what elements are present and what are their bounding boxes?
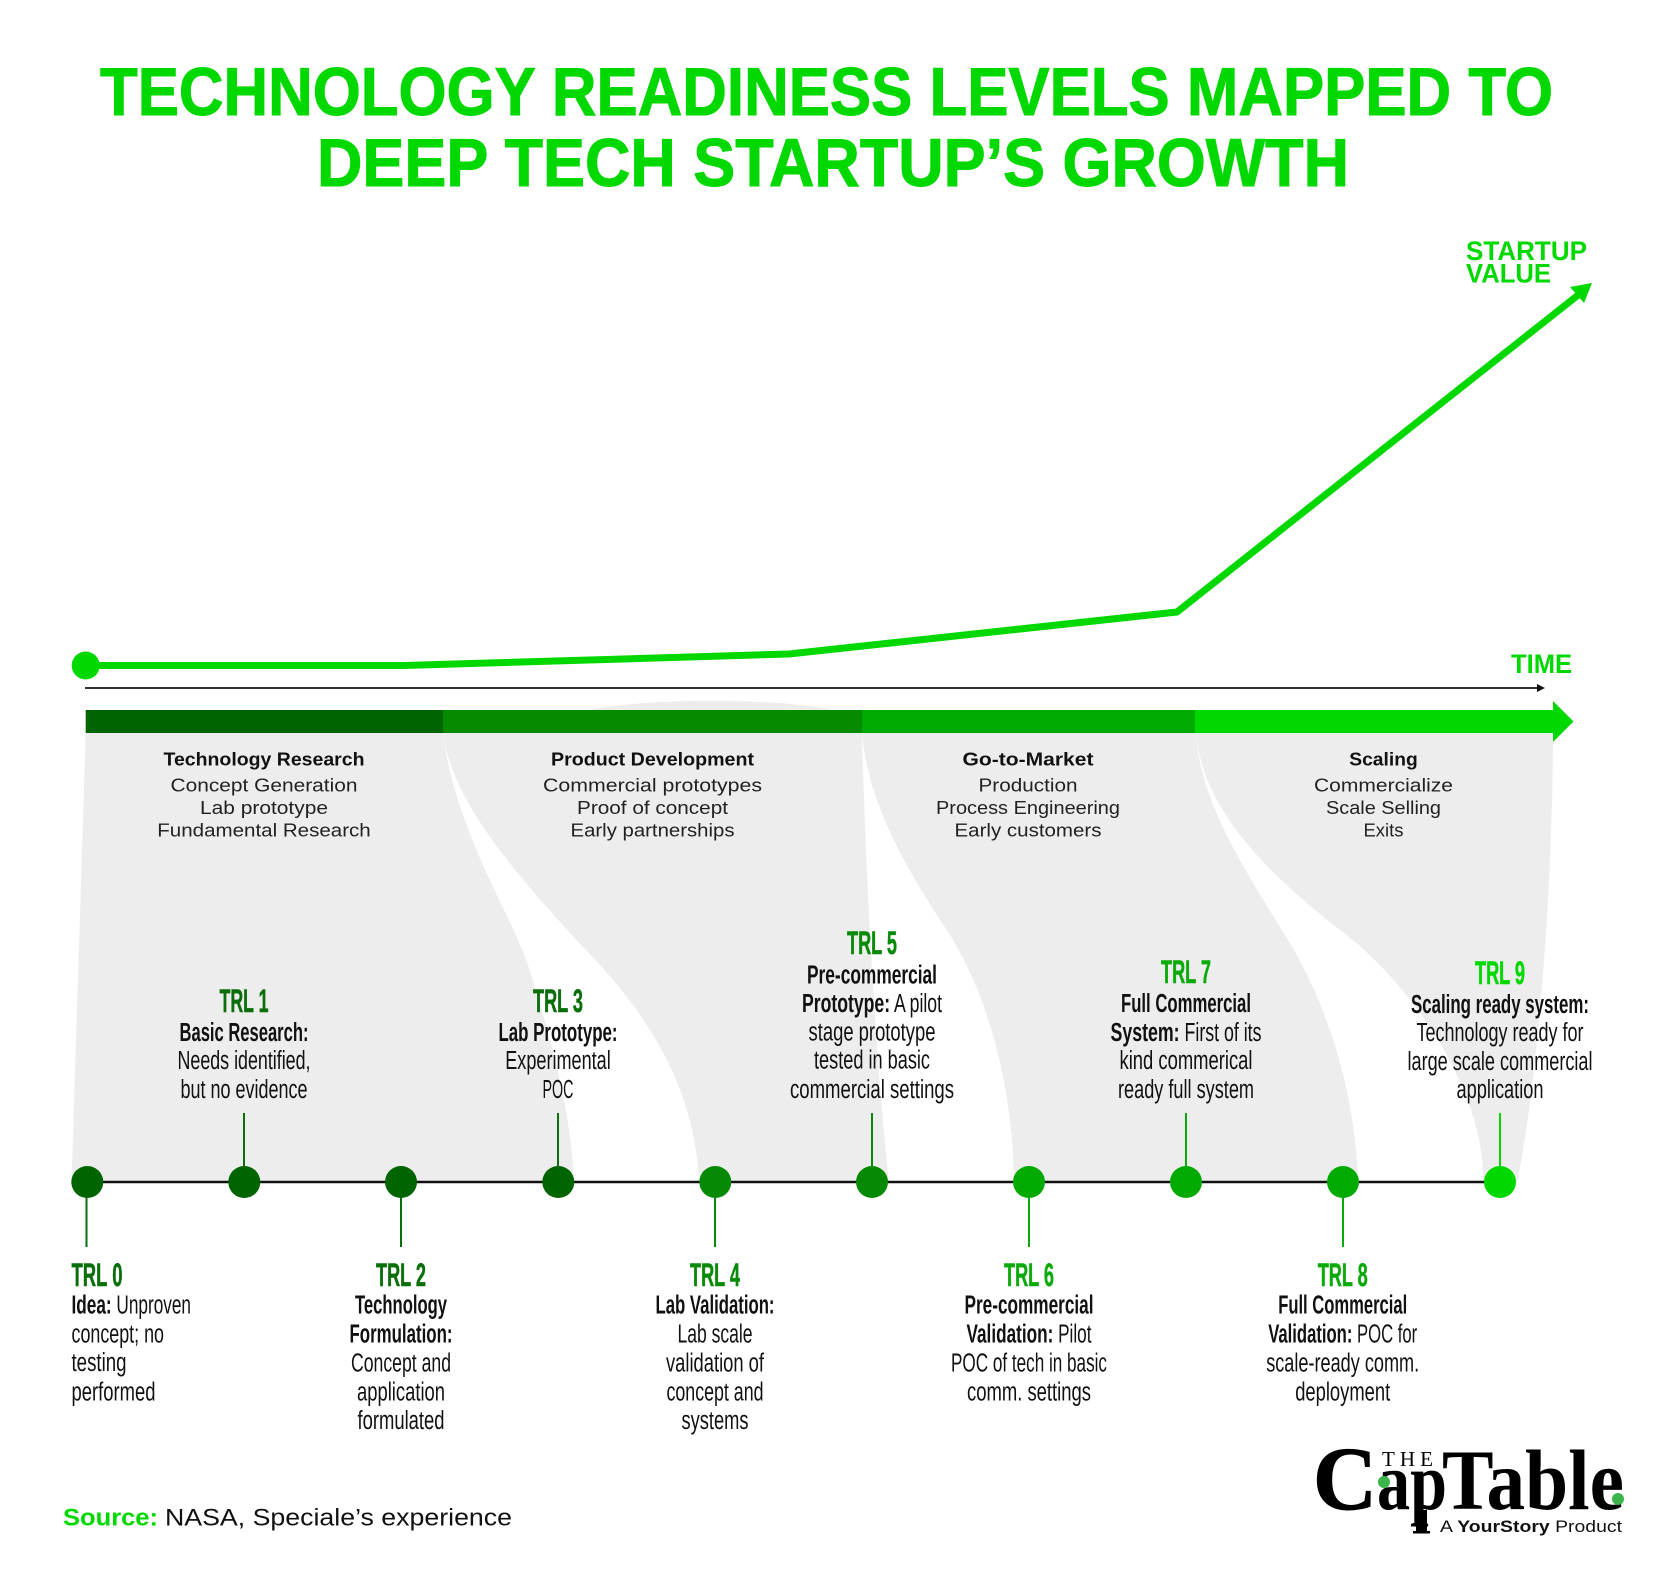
text: TRL 5: commercial settings: [790, 1076, 954, 1104]
text: TRL 8: [1266, 1257, 1419, 1406]
source note: Source:: [63, 1504, 158, 1532]
text: TRL 2: Technology: [355, 1292, 448, 1320]
band: scaling: [1196, 733, 1553, 1182]
text: TRL 1: Basic Research:: [180, 1019, 308, 1047]
band: go-to-market: [862, 733, 1358, 1182]
text: TRL 1: TRL 1: [220, 983, 268, 1019]
text: TRL 1: [178, 983, 310, 1104]
text: TRL 3: TRL 3: [533, 983, 583, 1019]
text: technology research stage: [157, 748, 371, 840]
text: go-to-market stage: Early customers: [954, 820, 1102, 840]
logo: The CapTable: ap: [1377, 1436, 1447, 1527]
text: TRL 7: ready full system: [1118, 1076, 1254, 1104]
text: scaling stage: [1314, 748, 1453, 840]
logo: The CapTable: C: [1313, 1430, 1377, 1529]
text: TRL 7: TRL 7: [1161, 954, 1211, 990]
text: TRL 3: POC: [542, 1076, 574, 1104]
segment: scaling: [1195, 701, 1574, 742]
text: TRL 2: formulated: [358, 1407, 444, 1435]
text: TRL 1: but no evidence: [180, 1076, 308, 1104]
text: TRL 1: Needs identified,: [178, 1047, 310, 1075]
text: scaling stage: Exits: [1364, 820, 1404, 840]
text: go-to-market stage: Process Engineering: [936, 797, 1120, 818]
text: TRL 3: [498, 983, 618, 1104]
text: TRL 4: validation of: [666, 1350, 765, 1378]
text: TRL 8: deployment: [1295, 1378, 1390, 1406]
text: scaling stage: Scale Selling: [1326, 797, 1441, 818]
text: TRL 6: POC of tech in basic: [951, 1350, 1107, 1378]
text: product development stage: Commercial prototypes: [543, 774, 762, 796]
text: TRL 8: scale-ready comm.: [1266, 1350, 1419, 1378]
nodes: [71, 1166, 1516, 1198]
logo: The CapTable: THE: [1382, 1447, 1433, 1471]
text: product development stage: Proof of concept: [577, 797, 728, 818]
text: TRL 4: TRL 4: [690, 1257, 740, 1293]
chart: startup value line: [72, 283, 1592, 680]
text: TRL 3: Lab Prototype:: [498, 1019, 618, 1047]
stems: [86, 1113, 1500, 1247]
band: technology research: [72, 733, 574, 1182]
text: TRL 9: application: [1456, 1076, 1544, 1104]
text: TRL 9: TRL 9: [1475, 955, 1525, 991]
text: TRL 0: testing: [72, 1349, 126, 1377]
text: TRL 4: Lab scale: [678, 1320, 752, 1348]
text: TRL 8: TRL 8: [1318, 1257, 1368, 1293]
text: TRL 2: TRL 2: [376, 1257, 426, 1293]
icon: logo green dot right: [1612, 1493, 1624, 1505]
text: TRL 0: TRL 0: [72, 1257, 122, 1293]
arrow: time axis: [85, 684, 1545, 692]
text: TRL 6: Validation: Pilot: [966, 1320, 1092, 1348]
text: technology research stage: Concept Generation: [170, 774, 358, 796]
title: TECHNOLOGY READINESS LEVELS MAPPED TO: [100, 54, 1553, 130]
text: TRL 6: [951, 1257, 1107, 1406]
logo: The CapTable: [1313, 1430, 1624, 1536]
axis label: startup value: VALUE: [1466, 258, 1551, 288]
source note: [63, 1504, 512, 1532]
axis label: time: TIME: [1511, 649, 1572, 679]
axis label: startup value: [1466, 236, 1587, 288]
text: go-to-market stage: Production: [978, 774, 1078, 796]
text: scaling stage: Commercialize: [1314, 774, 1453, 796]
text: TRL 0: performed: [72, 1378, 156, 1406]
text: TRL 5: TRL 5: [847, 925, 897, 961]
text: TRL 7: kind commerical: [1120, 1047, 1252, 1075]
text: TRL 0: Idea: Unproven: [72, 1292, 191, 1320]
text: TRL 4: systems: [682, 1407, 748, 1435]
text: product development stage: Product Development: [551, 748, 754, 770]
source note: NASA, Speciale’s experience: [165, 1504, 512, 1532]
text: TRL 7: [1110, 954, 1262, 1104]
axis label: startup value: STARTUP: [1466, 236, 1587, 266]
text: TRL 7: System: First of its: [1110, 1019, 1262, 1047]
logo: The CapTable: Table: [1442, 1432, 1624, 1528]
text: go-to-market stage: Go-to-Market: [962, 748, 1094, 770]
text: TRL 5: Pre-commercial: [807, 962, 937, 990]
text: TRL 5: stage prototype: [808, 1018, 936, 1046]
segment: technology research: [86, 710, 443, 733]
text: TRL 0: concept; no: [72, 1320, 164, 1348]
panel: grey stage bands: [72, 701, 1553, 1182]
chart: TRL timeline: [71, 1113, 1516, 1247]
text: TRL 9: large scale commercial: [1408, 1048, 1592, 1076]
text: TRL 2: Formulation:: [350, 1320, 452, 1348]
text: TRL 9: [1408, 955, 1592, 1104]
text: TRL 3: Experimental: [505, 1047, 611, 1075]
text: TRL 4: [656, 1257, 774, 1435]
band: product development: [443, 701, 889, 1182]
text: product development stage: [543, 748, 762, 840]
text: TRL 5: [790, 925, 954, 1104]
text: go-to-market stage: [936, 748, 1120, 840]
value curve: [86, 292, 1582, 666]
text: technology research stage: Technology Research: [164, 748, 364, 770]
text: TRL 7: Full Commercial: [1121, 990, 1251, 1018]
logo tagline: A YourStory Product: [1440, 1518, 1622, 1536]
text: TRL 2: [350, 1257, 452, 1435]
text: TRL 8: Full Commercial: [1278, 1292, 1407, 1320]
text: TRL 4: Lab Validation:: [656, 1292, 774, 1320]
value curve start marker: [72, 652, 100, 680]
text: TRL 6: TRL 6: [1004, 1257, 1054, 1293]
icon: logo green dot left: [1378, 1476, 1390, 1488]
text: TRL 2: Concept and: [351, 1350, 451, 1378]
text: TRL 6: comm. settings: [967, 1378, 1091, 1406]
text: TRL 8: Validation: POC for: [1268, 1320, 1418, 1348]
text: product development stage: Early partnerships: [570, 820, 734, 840]
text: TRL 9: Technology ready for: [1416, 1019, 1584, 1047]
text: TRL 2: application: [357, 1378, 445, 1406]
text: technology research stage: Fundamental Research: [157, 820, 371, 840]
text: TRL 4: concept and: [666, 1378, 764, 1406]
text: technology research stage: Lab prototype: [200, 797, 328, 818]
text: scaling stage: Scaling: [1349, 748, 1418, 770]
title: DEEP TECH STARTUP’S GROWTH: [317, 125, 1349, 201]
text: TRL 5: tested in basic: [814, 1046, 930, 1074]
title: [100, 54, 1553, 201]
segment: product development: [443, 710, 862, 733]
stage bar: [86, 701, 1574, 742]
text: TRL 6: Pre-commercial: [964, 1292, 1094, 1320]
icon: value arrow head: [1570, 283, 1592, 303]
text: TRL 0: [72, 1257, 191, 1406]
text: TRL 5: Prototype: A pilot: [802, 990, 942, 1018]
segment: go-to-market: [862, 710, 1195, 733]
